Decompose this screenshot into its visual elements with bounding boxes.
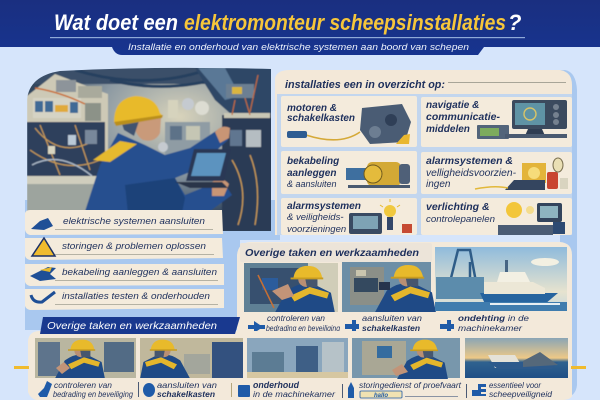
card: alarmsystemen links: alarmsystemen <box>287 201 361 212</box>
caption: bedrading: controleren van <box>267 313 325 323</box>
image: schakelkasten <box>342 262 436 312</box>
image: machinekamer <box>247 338 348 378</box>
caption: essentieel <box>466 380 552 399</box>
technician <box>84 96 232 210</box>
card: navigatie: communicatie- <box>426 112 501 123</box>
caption: controleren: controleren van <box>54 380 112 390</box>
title: elektromonteur scheepsinstallaties <box>184 10 506 35</box>
yellow tick left <box>14 366 29 369</box>
task list <box>25 210 224 310</box>
task 1 <box>25 210 223 235</box>
caption: ondehting <box>440 313 529 333</box>
caption: bedrading <box>248 313 340 333</box>
icon: radar screen <box>477 100 567 139</box>
card: motoren <box>281 96 417 147</box>
image: schip zonsondergang <box>465 338 568 378</box>
image: bedrading controleren <box>244 263 338 312</box>
task 4: installaties testen & onderhouden <box>62 291 210 302</box>
caption: controleren: bedrading en beveiliging <box>53 389 133 399</box>
caption: storingsdienst: storingedienst of proefvaart <box>359 380 462 390</box>
laptop <box>175 149 231 188</box>
card: bekabeling: aanleggen <box>287 168 336 179</box>
caption: ondehting: machinekamer <box>458 323 523 333</box>
caption: aansluiten <box>138 380 217 399</box>
card: bekabeling <box>281 151 417 194</box>
caption: storingsdienst: hallo <box>374 393 388 399</box>
card: bekabeling: bekabeling <box>287 156 339 167</box>
caption: aansluiten: aansluiten van <box>157 380 217 390</box>
card: alarmsystemen rechts: ingen <box>426 179 451 190</box>
title: Wat doet een <box>54 10 178 35</box>
title: ? <box>508 10 521 35</box>
panel: installaties overzicht <box>275 70 572 235</box>
card: verlichting: controlepanelen <box>426 214 495 225</box>
subtitle: Installatie en onderhoud van elektrische systemen aan boord van schepen <box>128 42 469 52</box>
right outer blue edge <box>270 70 577 398</box>
caption: schakelkasten: aansluiten van <box>362 313 422 323</box>
ceiling pipes <box>75 70 230 86</box>
caption: aansluiten: schakelkasten <box>157 389 215 399</box>
task 4 <box>25 289 224 310</box>
task 3: bekabeling aanleggen & aansluiten <box>62 267 217 278</box>
icon: alarm and extinguisher <box>475 158 568 190</box>
caption: storingsdienst <box>342 380 462 399</box>
card: bekabeling: & aansluiten <box>287 179 337 189</box>
task 1: elektrische systemen aansluiten <box>63 216 205 227</box>
task 2: storingen & problemen oplossen <box>62 241 206 252</box>
section banner: Overige taken en werkzaamheden <box>47 320 217 332</box>
caption: controleren <box>38 380 133 399</box>
caption: schakelkasten: schakelkasten <box>362 323 420 333</box>
main illustration: technician at switchboard <box>27 66 273 234</box>
image: schip <box>435 247 567 311</box>
card: alarmsystemen rechts <box>421 152 572 194</box>
right switchboard <box>222 75 272 231</box>
card: navigatie: navigatie & <box>426 100 479 111</box>
task 2 <box>25 238 223 260</box>
panel: overige taken rechts <box>237 242 572 400</box>
icon: motor <box>287 104 411 144</box>
card: alarmsystemen rechts: alarmsystemen & <box>426 156 513 167</box>
image: storingsdienst <box>352 338 460 379</box>
card: motoren: motoren & <box>287 103 337 114</box>
caption: essentieel: essentieel voor <box>489 380 542 390</box>
task 3 <box>25 264 224 286</box>
caption: ondehting: ondehting in de <box>458 313 529 323</box>
caption: onderhoud <box>231 380 336 399</box>
caption: bedrading: bedrading en beveiliging <box>266 323 340 333</box>
blue backing panel <box>25 200 280 330</box>
heading: installaties een in overzicht op: <box>285 79 445 91</box>
caption: onderhoud: in de machinekamer <box>253 389 336 399</box>
heading: Overige taken en werkzaamheden <box>245 247 419 259</box>
card: alarmsystemen links: voorzieningen <box>287 224 346 235</box>
card: navigatie <box>421 97 572 147</box>
icon: generator <box>346 162 410 188</box>
section banner <box>40 317 240 334</box>
title <box>54 10 521 35</box>
card: verlichting <box>421 198 572 235</box>
panel: overige taken onder <box>28 331 572 400</box>
card: verlichting: verlichting & <box>426 201 490 213</box>
card: alarmsystemen links <box>281 198 417 235</box>
caption: essentieel: scheepveiligneid <box>489 389 552 399</box>
icon: alarm light and panel <box>349 199 412 234</box>
left cabinet <box>27 73 108 211</box>
card: navigatie: middelen <box>426 124 470 135</box>
card: alarmsystemen rechts: velligheidsvoorzien- <box>426 168 517 179</box>
icon: lamp and monitor <box>498 202 565 235</box>
back wall instruments <box>158 98 210 162</box>
card: motoren: schakelkasten <box>287 113 355 124</box>
image: monteur met tester <box>35 338 136 378</box>
caption: schakelkasten <box>345 313 422 333</box>
caption: onderhoud: onderhoud <box>253 380 299 390</box>
yellow tick right <box>571 366 586 369</box>
header band <box>0 0 600 55</box>
card: alarmsystemen links: & veiligheids- <box>287 212 344 223</box>
image: monteur bij kast <box>140 338 243 378</box>
